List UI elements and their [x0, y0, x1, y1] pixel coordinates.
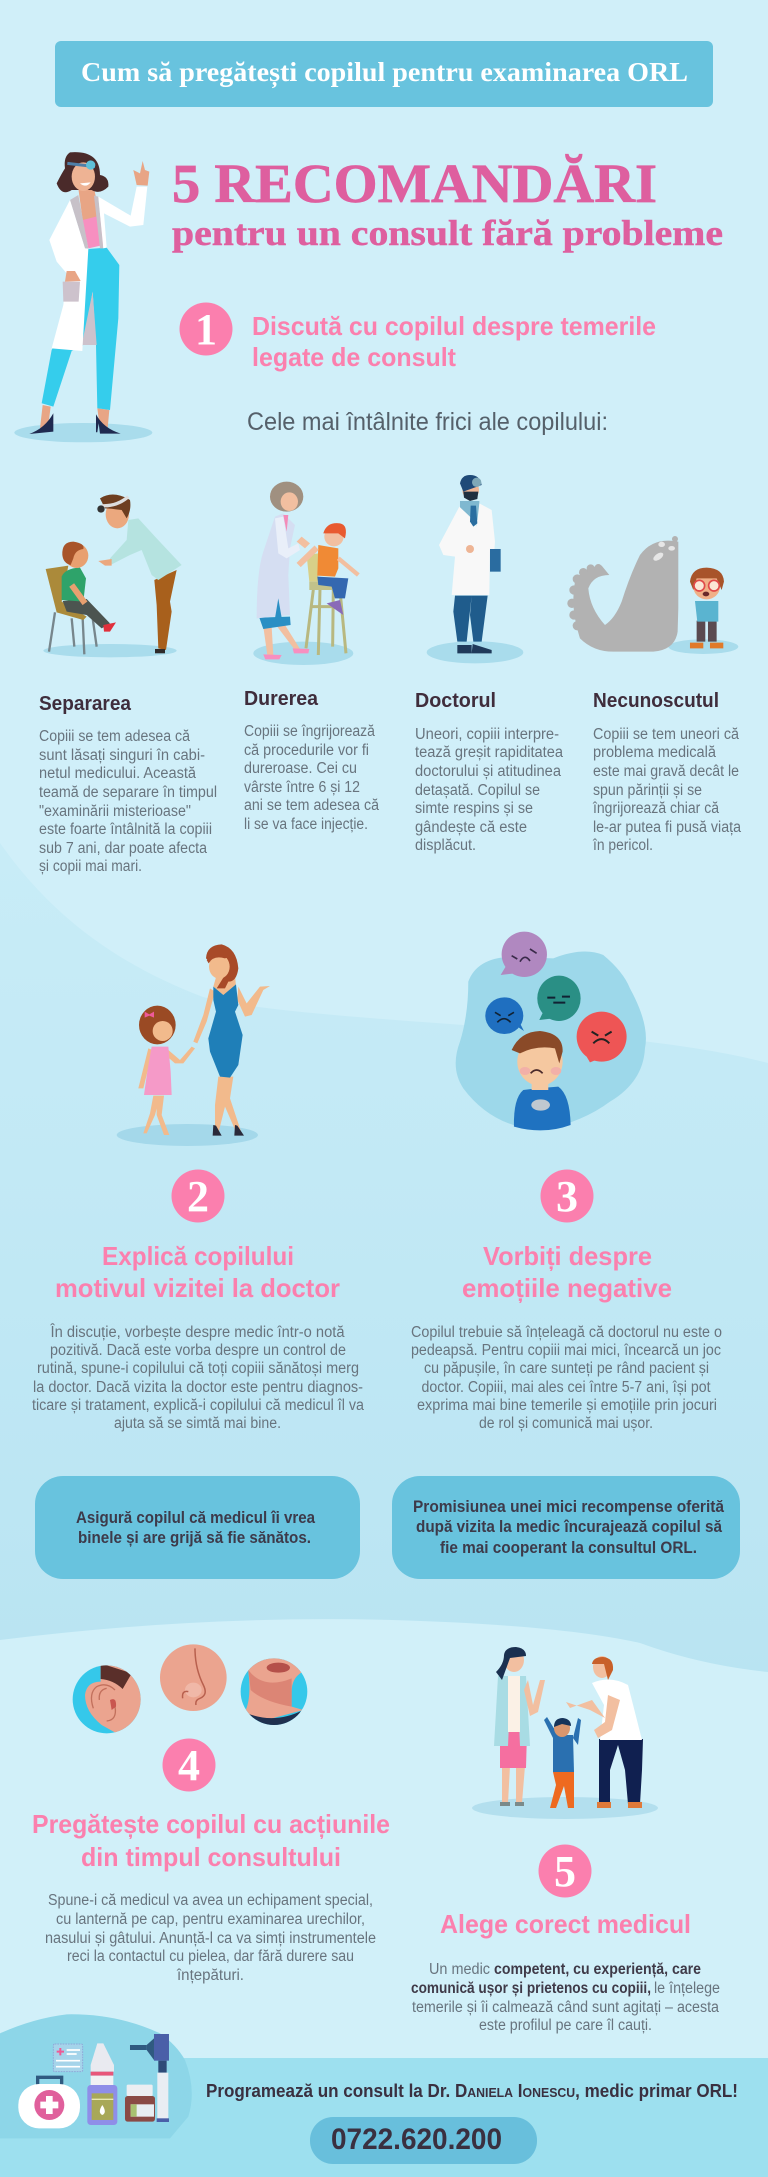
fear: doctorul: gândește că este — [415, 819, 527, 836]
icon: clipboard card — [53, 2044, 83, 2072]
phone pill: 0722.620.200 — [331, 2123, 502, 2156]
fear: necunoscutul: îngrijorează chiar că — [592, 800, 719, 817]
fear: necunoscutul — [592, 690, 741, 854]
icon: throat — [240, 1658, 308, 1725]
step 4 body: reci la contactul cu pielea, dar fără durere sau — [67, 1948, 354, 1965]
step 4 body: nasului și gâtului. Anunță-l ca va simți instrumentele — [45, 1930, 376, 1947]
fear: necunoscutul: problema medicală — [593, 744, 716, 761]
fear: separarea: netul medicului. Această — [39, 765, 196, 782]
step 5 badge — [538, 1844, 592, 1898]
footer blob with medical icons — [0, 2014, 192, 2138]
fear: doctorul: doctorului și atitudinea — [415, 763, 561, 780]
step 2 body: În discuție, vorbește despre medic într-o notă — [50, 1324, 345, 1341]
step 1 badge: 1 — [195, 305, 217, 354]
callout: reward: după vizita la medic încurajează copilul să — [416, 1517, 722, 1536]
footer band — [0, 2058, 768, 2177]
emotion bubble: blue — [485, 997, 524, 1034]
icon: otoscope — [130, 2034, 169, 2122]
illustration: mother and daughter — [117, 944, 270, 1146]
step 3 badge: 3 — [556, 1172, 578, 1221]
fear: durerea: că procedurile vor fi — [244, 742, 369, 759]
step 3 body: exprima mai bine temerile și emoțiile prin jocuri — [417, 1397, 717, 1414]
step 2 heading: motivul vizitei la doctor — [55, 1273, 340, 1303]
illustration: pain — [253, 482, 358, 665]
fear: separarea: sub 7 ani, dar poate afecta — [39, 840, 207, 857]
callout: reward — [392, 1476, 740, 1579]
icon: ear — [72, 1665, 141, 1734]
fear: durerea: ani se tem adesea că — [244, 797, 379, 814]
emotion bubble: purple — [501, 932, 547, 977]
icon: dropper bottle — [87, 2043, 117, 2125]
fear: separarea: Copiii se tem adesea că — [39, 728, 190, 745]
fear: durerea: li se va face injecție. — [244, 816, 368, 833]
step 2 body: ticare și tratament, explică-i copilului că medicul îl va — [32, 1397, 364, 1414]
illustration: fear of the unknown — [567, 536, 738, 654]
callout: reward: fie mai cooperant la consultul ORL. — [440, 1538, 697, 1557]
fear: separarea: teamă de separare în timpul — [39, 784, 217, 801]
step 4 heading — [32, 1809, 390, 1872]
subtitle: pentru un consult: pentru un consult fără probleme — [172, 213, 723, 253]
fear: durerea — [244, 688, 379, 833]
step 2 body: pozitivă. Dacă este vorba despre un control de — [50, 1342, 346, 1359]
fear: separarea: și copii mai mari. — [39, 858, 142, 875]
step 1 badge — [180, 302, 232, 356]
fear: doctorul: Doctorul — [415, 690, 496, 712]
step 4 heading: din timpul consultului — [81, 1842, 341, 1872]
step 5 body: competent, cu experiență, care — [494, 1961, 701, 1978]
step 4 badge — [162, 1738, 216, 1792]
fear: doctorul: Uneori, copiii interpre- — [415, 726, 559, 743]
step 2 body — [32, 1324, 364, 1432]
fear: durerea: dureroase. Cei cu — [244, 760, 357, 777]
step 2 body: ajuta să se simtă mai bine. — [114, 1415, 281, 1432]
fear: doctorul: simte respins și se — [415, 800, 533, 817]
icon: nose — [160, 1644, 227, 1711]
fear: necunoscutul: în pericol. — [592, 837, 653, 854]
callout: reward: Promisiunea unei mici recompense oferită — [413, 1497, 724, 1516]
step 5 body: comunică ușor și prietenos cu copiii, — [411, 1980, 651, 1997]
step 4 body — [45, 1892, 376, 1984]
title: 5 recomandari: 5 RECOMANDĂRI — [172, 153, 657, 214]
fear: doctorul: displăcut. — [415, 837, 476, 854]
icon: jar — [125, 2085, 155, 2122]
callout: reassurance — [35, 1476, 360, 1579]
step 2 heading: Explică copilului — [102, 1241, 294, 1271]
step 1 heading: legate de consult — [252, 342, 456, 372]
illustration: boy with negative emotions — [456, 932, 646, 1130]
callout: reassurance: Asigură copilul că medicul îi vrea — [76, 1508, 315, 1527]
step 3 body — [411, 1324, 722, 1432]
fear: separarea — [39, 693, 217, 875]
step 1 heading: Discută cu copilul despre temerile — [252, 311, 656, 341]
fear: necunoscutul: este mai gravă decât le — [593, 763, 739, 780]
illustration: doctor — [427, 475, 523, 663]
fear: separarea: Separarea — [39, 693, 132, 715]
step 3 body: doctor. Copiii, mai ales cei între 5-7 ani, își pot — [422, 1379, 711, 1396]
step 3 heading — [462, 1241, 672, 1303]
step 4 body: înțepături. — [176, 1967, 244, 1984]
step 2 body: la doctor. Dacă vizita la doctor este pentru diagnos- — [33, 1379, 363, 1396]
fear: necunoscutul: le-ar putea fi pusă viața — [593, 819, 741, 836]
step 2 heading — [55, 1241, 340, 1303]
step 3 body: de rol și comunică mai ușor. — [479, 1415, 653, 1432]
fear: durerea: vârste între 6 și 12 — [244, 779, 360, 796]
step 5 body: temerile și îi calmează când sunt agitați – acesta — [412, 1999, 719, 2016]
step 5 body: este profilul pe care îl cauți. — [479, 2017, 652, 2034]
fear: separarea: sunt lăsați singuri în cabi- — [39, 747, 205, 764]
step 3 heading: emoțiile negative — [462, 1273, 672, 1303]
banner: subtitle: Cum să pregătești copilul pentru examinarea ORL — [81, 57, 688, 88]
fear: separarea: "examinării misterioase" — [39, 803, 191, 820]
fear: doctorul — [415, 690, 563, 854]
banner: subtitle — [55, 41, 713, 107]
emotion bubble: green — [537, 976, 581, 1021]
step 2 body: rutină, spune-i copilului că toți copiii sănătoși merg — [37, 1360, 359, 1377]
step 4 body: cu lanternă pe cap, pentru examinarea urechilor, — [56, 1911, 365, 1928]
illustration: doctor, child and parent — [472, 1647, 658, 1819]
fear: necunoscutul: spun părinții și se — [593, 782, 702, 799]
fear: doctorul: detașată. Copilul se — [415, 782, 540, 799]
fear: necunoscutul: Necunoscutul — [593, 690, 719, 712]
emotion bubble: red — [577, 1012, 627, 1062]
fear: durerea: Copiii se îngrijorează — [244, 723, 375, 740]
icon: first aid kit — [18, 2076, 80, 2128]
step 3 heading: Vorbiți despre — [483, 1241, 652, 1271]
fears intro: Cele mai întâlnite frici ale copilului: — [247, 408, 608, 436]
step 2 badge — [172, 1170, 224, 1222]
step 5 badge: 5 — [554, 1847, 576, 1896]
step 2 badge: 2 — [187, 1172, 209, 1221]
illustration: separation — [43, 495, 182, 657]
step 5 body: le înțelege — [654, 1980, 720, 1997]
step 5 heading: Alege corect medicul — [440, 1909, 691, 1939]
call to action: Programează un consult la Dr. Daniela Ionescu, medic primar ORL! — [206, 2081, 738, 2101]
step 3 body: cu păpușile, în care sunteți pe rând pacient și — [424, 1360, 709, 1377]
fear: separarea: este foarte întâlnită la copiii — [39, 821, 212, 838]
phone pill — [310, 2117, 537, 2164]
step 4 heading: Pregătește copilul cu acțiunile — [32, 1809, 390, 1839]
step 4 body: Spune-i că medicul va avea un echipament special, — [48, 1892, 373, 1909]
step 4 badge: 4 — [178, 1741, 200, 1790]
step 3 body: Copilul trebuie să înțeleagă că doctorul nu este o — [411, 1324, 722, 1341]
fear: necunoscutul: Copiii se tem uneori că — [593, 726, 739, 743]
fear: doctorul: tează greșit rapiditatea — [415, 744, 563, 761]
step 5 body: Un medic — [429, 1961, 490, 1978]
step 3 badge — [540, 1170, 594, 1222]
illustration: female doctor pointing up — [14, 152, 152, 442]
step 5 body — [411, 1961, 720, 2034]
fear: durerea: Durerea — [244, 688, 319, 710]
step 3 body: pedeapsă. Pentru copiii mai mici, încearcă un joc — [411, 1342, 721, 1359]
callout: reassurance: binele și are grijă să fie sănătos. — [78, 1528, 311, 1547]
step 1 heading — [252, 311, 656, 372]
